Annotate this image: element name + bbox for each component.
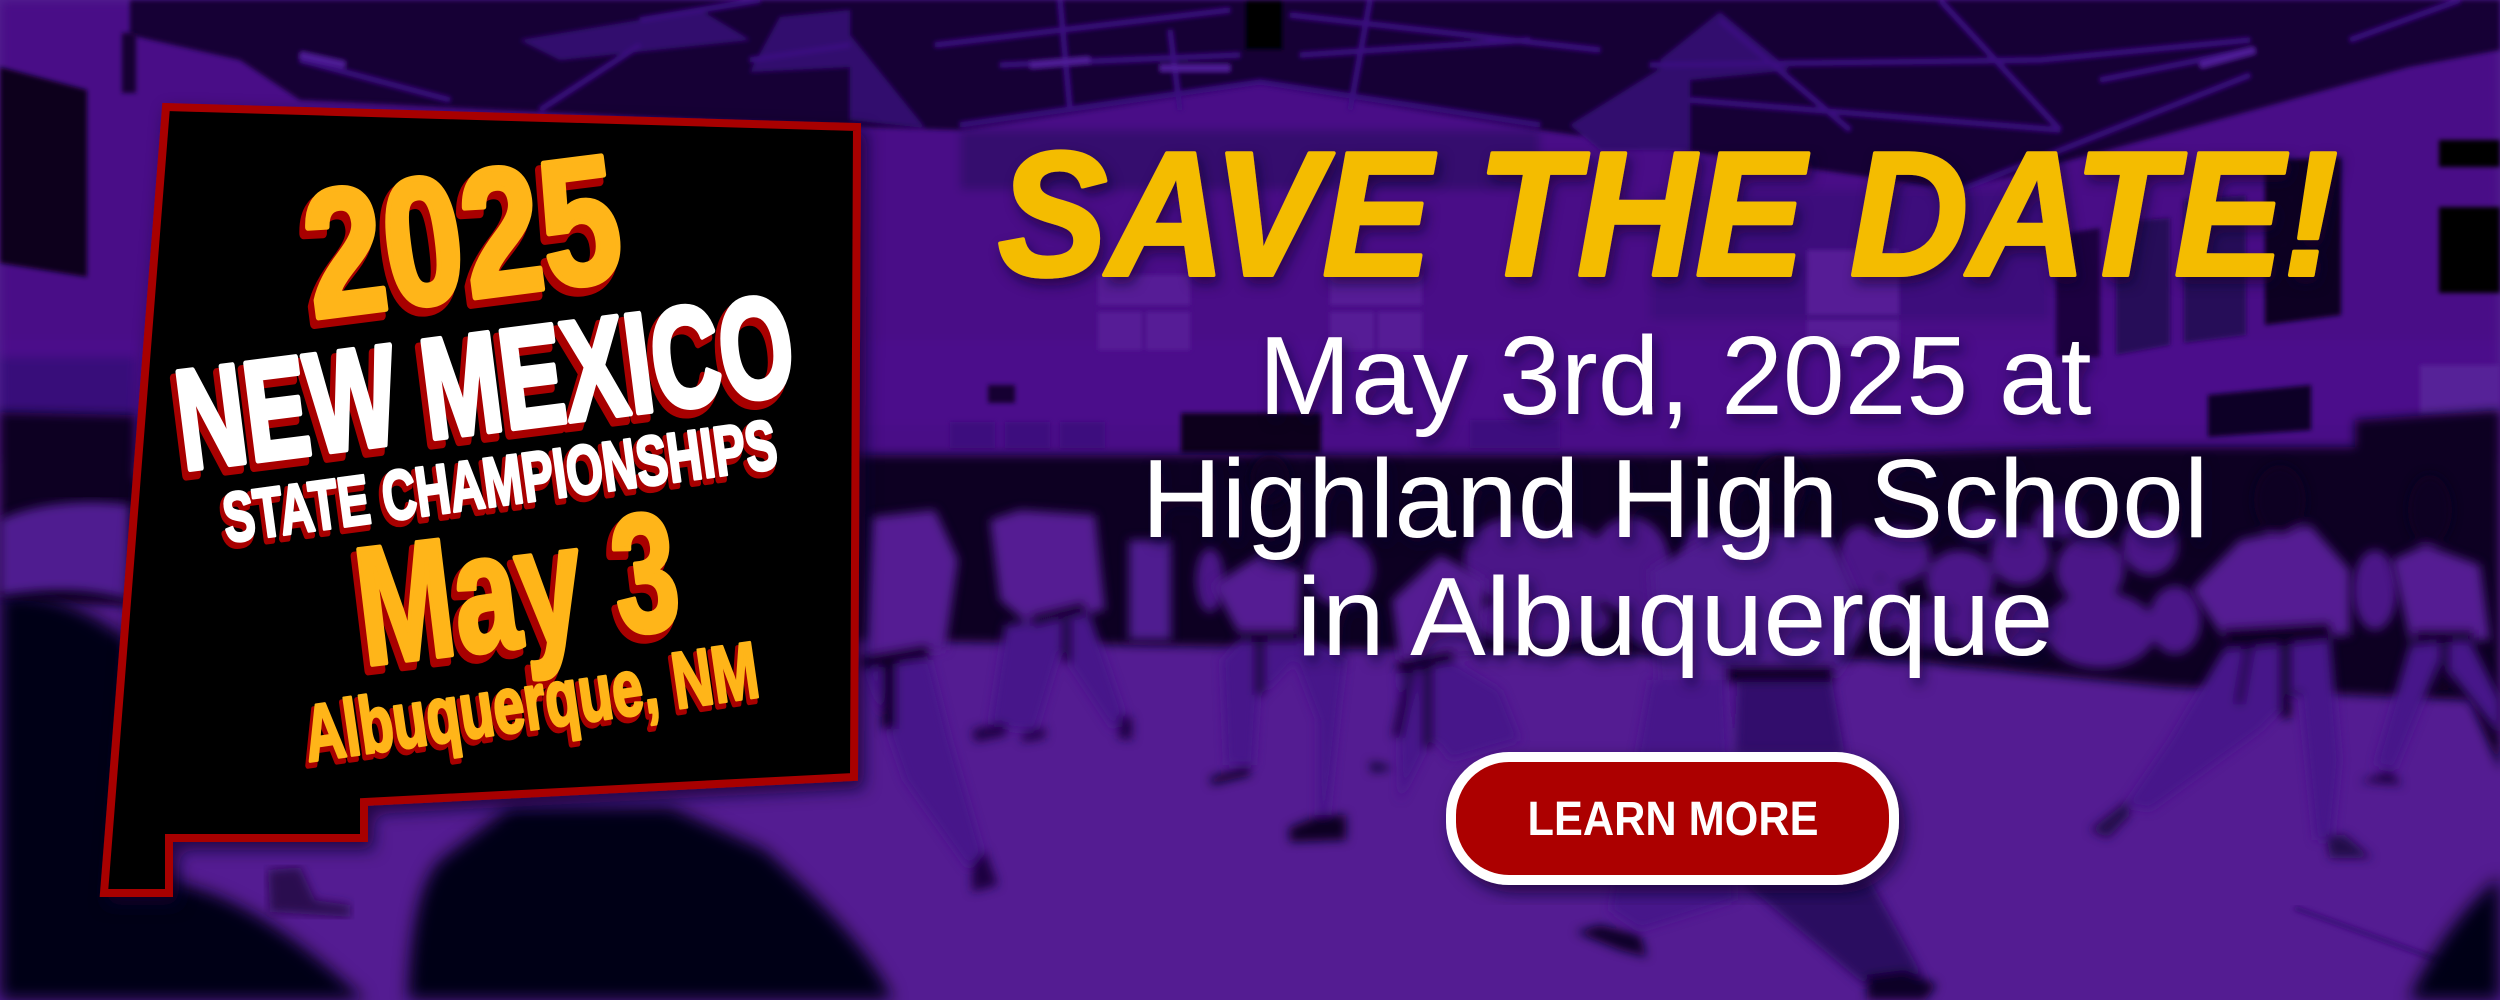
competitor beside the state shape [972,510,1171,742]
gym wall [0,0,2500,460]
upper left shoulder [0,502,130,600]
heading New Mexico: NEW MEXICO [163,272,798,507]
wall banners, windows and scoreboards [0,33,2500,453]
text block: event details: Highland High School [1142,437,2208,561]
location Albuquerque, NM [295,625,765,783]
competitor behind city text [1392,555,1520,800]
location Albuquerque, NM: Albuquerque, NM [296,629,762,783]
dark bleachers band [0,410,2500,770]
location Albuquerque, NM: Albuquerque, NM [298,625,764,778]
heading: save the date: SAVE THE DATE! [998,115,2338,313]
competitor centre left [1210,555,1395,842]
foreground silhouettes [0,594,2500,1000]
year 2025: 2025 [288,124,627,363]
background crowd [1196,502,2397,668]
panel: New Mexico state shape [104,107,857,893]
button: learn more: LEARN MORE [1528,793,1818,846]
subheading State Championships [215,405,782,562]
state outline [104,107,857,893]
subheading State Championships: STATE CHAMPIONSHIPS [218,405,781,557]
subheading State Championships: STATE CHAMPIONSHIPS [216,410,779,562]
date May 3 [341,476,689,708]
competitor left of date text [859,510,998,892]
year 2025: 2025 [293,117,632,357]
shoe on the floor [268,867,350,917]
competitor front right [2090,525,2372,858]
text block: event details: in Albuquerque [1296,555,2054,679]
heading New Mexico: NEW MEXICO [167,265,802,501]
karate competitors [859,455,2500,1000]
date May 3: May 3 [342,482,684,708]
floor line [2295,908,2447,963]
competitor in the centre [1576,530,1937,1000]
date May 3: May 3 [346,476,688,701]
heading New Mexico [162,265,803,507]
competitor far right [2360,545,2500,785]
text block: event details [1142,314,2208,679]
ceiling trusses [130,0,2500,190]
button: learn more [1451,757,1894,880]
competitor heads [1250,455,2452,545]
text block: event details: May 3rd, 2025 at [1258,314,2092,438]
